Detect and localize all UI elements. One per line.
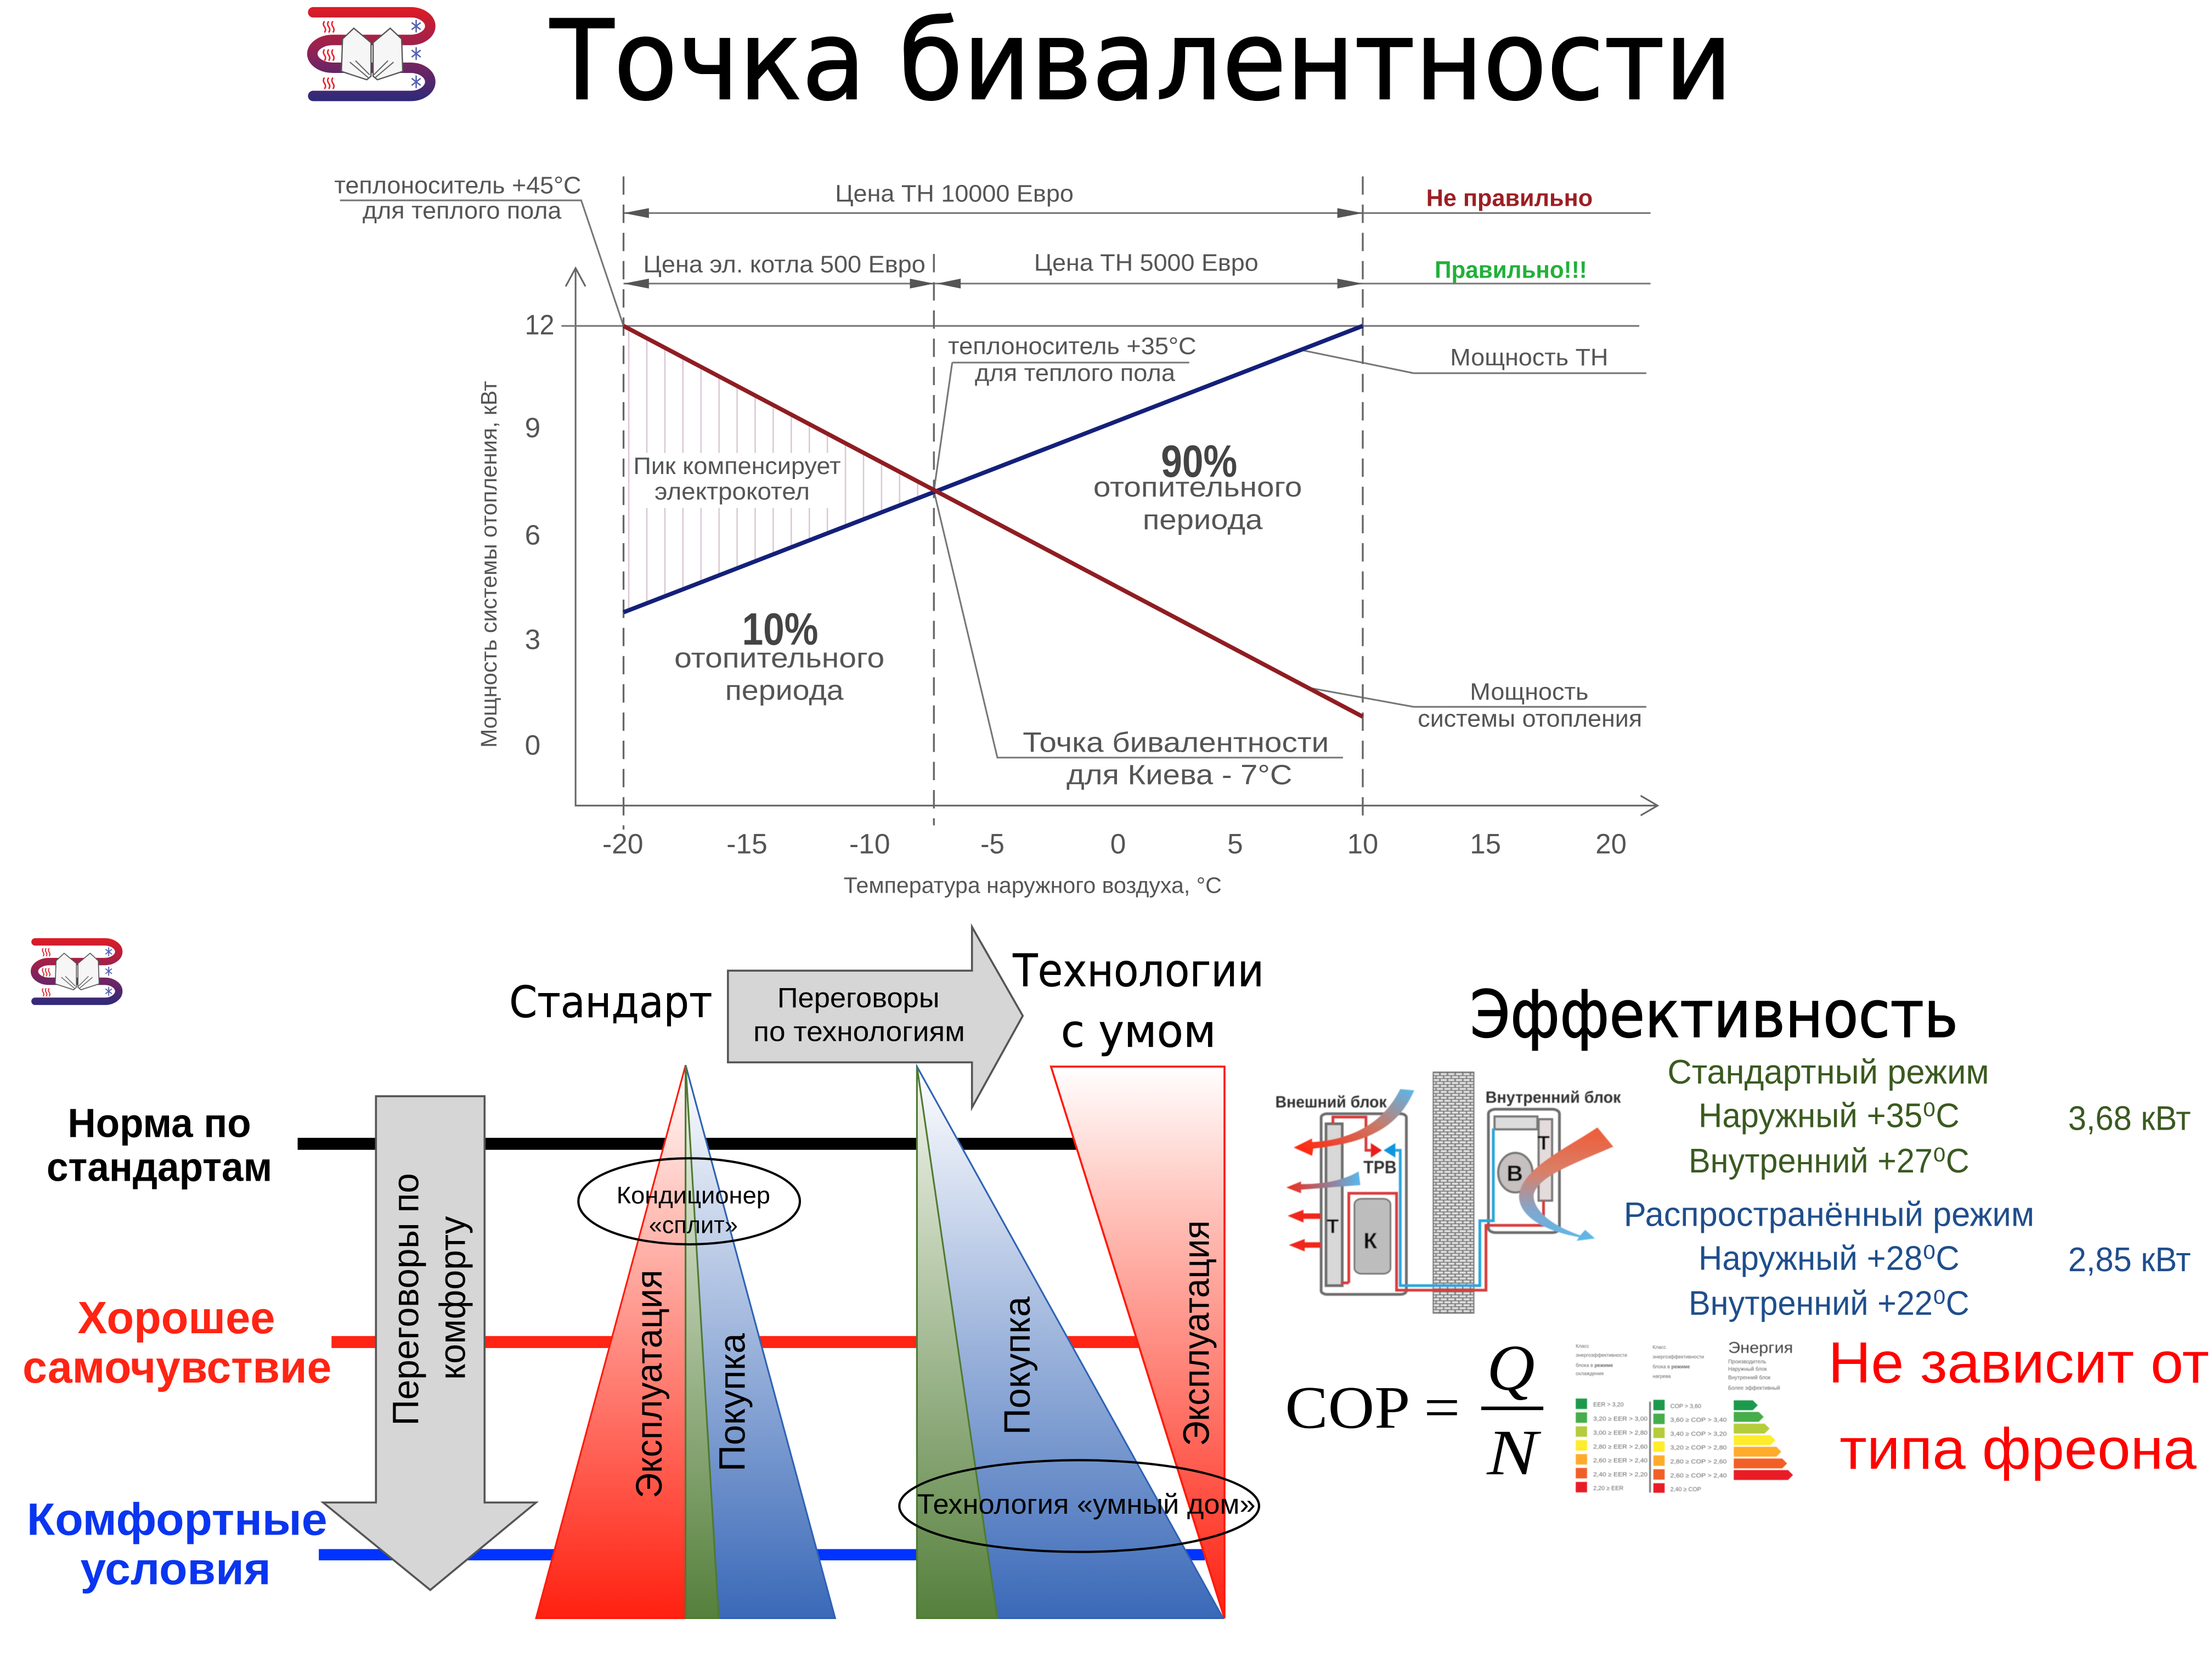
callout: 90 percent: 90% <box>1161 437 1237 487</box>
triangle group: smart technologies: Эксплуатация <box>1176 1220 1217 1446</box>
callout: independent of freon type: Не зависит от <box>1829 1331 2209 1395</box>
diagram labels: Внешний блок <box>1276 1093 1387 1112</box>
cooling class column: 3,20 ≥ EER > 3,00 <box>1593 1415 1647 1422</box>
diagram labels: Т <box>1327 1215 1339 1237</box>
label: norm by standards <box>47 1100 272 1189</box>
text block: standard mode: Стандартный режим <box>1667 1053 1989 1091</box>
arrow: comfort negotiations: Переговоры по <box>385 1173 426 1425</box>
triangle: purchase cost smart <box>917 1067 1223 1618</box>
triangle: operation cost smart <box>1051 1067 1224 1618</box>
chart annotations: Цена эл. котла 500 Евро <box>644 251 926 278</box>
text block: common mode: Внутренний +22⁰С <box>1689 1285 1970 1323</box>
label: norm by standards: стандартам <box>47 1143 272 1189</box>
label: comfortable conditions <box>27 1495 328 1594</box>
cooling class column: блока в режиме <box>1576 1362 1613 1368</box>
triangle: technology share smart <box>917 1067 997 1618</box>
cooling class column: 2,60 ≥ EER > 2,40 <box>1593 1458 1647 1464</box>
diagram labels: В <box>1506 1160 1523 1186</box>
wall <box>1434 1072 1474 1313</box>
heating class column: Класс <box>1652 1344 1666 1350</box>
formula: COP <box>1285 1332 1543 1488</box>
triangle: purchase cost <box>686 1065 835 1618</box>
dashed verticals <box>624 176 1363 830</box>
text block: common mode: 2,85 кВт <box>2068 1241 2191 1279</box>
line: heating system power <box>624 326 1363 717</box>
energy label arrows: Более эффективный <box>1728 1385 1780 1391</box>
callout: 90 percent: отопительного <box>1093 471 1302 503</box>
callout: bivalence point Kyiv: Точка бивалентности <box>1023 726 1329 758</box>
label: good wellbeing <box>22 1293 331 1392</box>
chart annotations: Пик компенсирует <box>634 453 841 480</box>
chart annotations <box>334 172 1642 732</box>
cooling class column: энергоэффективности <box>1576 1352 1627 1358</box>
callout: split air conditioner <box>578 1158 800 1244</box>
callout: 10 percent: 10% <box>742 605 818 655</box>
heating class column: 3,60 ≥ COP > 3,40 <box>1671 1417 1726 1424</box>
text block: standard mode: 3,68 кВт <box>2068 1100 2191 1138</box>
arrow: technology negotiations: Переговоры <box>777 982 940 1013</box>
hatch: peak compensated by electric boiler <box>629 329 918 610</box>
callout: smart home technology: Технология «умный дом» <box>917 1488 1256 1520</box>
callout: bivalence point Kyiv: для Киева - 7°С <box>1066 759 1292 791</box>
chart: bivalence point: Температура наружного воздуха, °С <box>844 873 1222 898</box>
heating class column: энергоэффективности <box>1652 1354 1704 1360</box>
line: heat pump power <box>624 326 1363 612</box>
text block: standard mode <box>1667 1053 2191 1180</box>
label: comfortable conditions: Комфортные <box>27 1495 328 1545</box>
axis tick labels: 15 <box>1470 828 1501 860</box>
diagram: split system <box>1276 1072 1621 1313</box>
diagram labels: ТРВ <box>1363 1157 1397 1177</box>
callout: 90 percent: периода <box>1143 503 1263 535</box>
arrow: technology negotiations <box>728 927 1023 1108</box>
chart annotations: системы отопления <box>1418 705 1642 732</box>
diagram labels: Т <box>1538 1132 1550 1154</box>
chart annotations: Цена ТН 5000 Евро <box>1034 250 1259 277</box>
heating class column: блока в режиме <box>1652 1364 1690 1369</box>
text block: standard mode: Внутренний +27⁰С <box>1689 1142 1970 1180</box>
callout: 90 percent <box>1093 437 1302 535</box>
guide lines <box>340 200 1651 758</box>
energy label arrows: Энергия <box>1728 1339 1793 1356</box>
axes <box>566 268 1657 815</box>
axis tick labels: 0 <box>525 729 540 761</box>
formula: COP: Q <box>1487 1332 1535 1404</box>
callout: 10 percent: периода <box>725 674 844 706</box>
diagram labels: Внутренний блок <box>1486 1089 1621 1107</box>
logo: top <box>312 12 430 96</box>
energy label arrows <box>1728 1339 1793 1480</box>
axis tick labels: -10 <box>849 828 890 860</box>
cooling class column: EER > 3,20 <box>1593 1402 1624 1408</box>
heating class column <box>1652 1344 1726 1493</box>
dimension arrows <box>624 208 1363 289</box>
label: norm by standards: Норма по <box>67 1100 251 1146</box>
heading: smart technologies: с умом <box>1061 1006 1216 1058</box>
chart: bivalence point <box>334 172 1657 898</box>
cooling class column: 2,40 ≥ EER > 2,20 <box>1593 1471 1647 1478</box>
heading: smart technologies: Технологии <box>1012 945 1264 997</box>
chart annotations: для теплого пола <box>975 359 1176 386</box>
chart annotations: Мощность ТН <box>1450 344 1608 371</box>
heating class column: 3,40 ≥ COP > 3,20 <box>1671 1431 1726 1437</box>
heating class column: 2,60 ≥ COP > 2,40 <box>1671 1473 1726 1479</box>
axis tick labels: 20 <box>1595 828 1627 860</box>
callout: 10 percent <box>674 605 884 706</box>
axis tick labels: -5 <box>980 828 1005 860</box>
triangle: operation cost <box>536 1065 686 1618</box>
verdict: wrong: Не правильно <box>1426 184 1593 211</box>
chart annotations: теплоноситель +35°С <box>948 332 1197 359</box>
heating class column: 3,20 ≥ COP > 2,80 <box>1671 1445 1726 1451</box>
axis tick labels: 6 <box>525 519 540 551</box>
label: comfortable conditions: условия <box>81 1544 271 1594</box>
formula: COP: COP = <box>1285 1373 1460 1441</box>
callout: split air conditioner: Кондиционер <box>617 1182 770 1209</box>
text block: common mode <box>1624 1196 2191 1323</box>
chart annotations: для теплого пола <box>363 198 562 224</box>
axis tick labels: 0 <box>1110 828 1126 860</box>
heading: standard: Стандарт <box>509 977 713 1028</box>
triangle: technology share <box>686 1065 719 1618</box>
heading: efficiency: Эффективность <box>1470 977 1958 1052</box>
callout: independent of freon type <box>1829 1331 2209 1481</box>
chart annotations: теплоноситель +45°С <box>334 172 581 199</box>
triangle group: smart technologies: Покупка <box>997 1296 1038 1435</box>
heading: smart technologies <box>1012 945 1264 1058</box>
callout: split air conditioner: «сплит» <box>649 1211 738 1238</box>
title: Точка бивалентности <box>550 0 1733 125</box>
axis tick labels: 10 <box>1347 828 1378 860</box>
cooling class column: 2,20 ≥ EER <box>1593 1485 1623 1492</box>
cooling class column: охлаждения <box>1576 1371 1604 1376</box>
formula: COP: N <box>1486 1417 1542 1488</box>
chart annotations: Мощность <box>1470 678 1588 705</box>
callout: smart home technology <box>899 1460 1259 1552</box>
heating class column: COP > 3,60 <box>1671 1403 1701 1409</box>
energy label arrows: Наружный блок <box>1728 1367 1767 1373</box>
heating class column: 2,40 ≥ COP <box>1671 1486 1701 1493</box>
arrow: comfort negotiations: комфорту <box>432 1216 473 1380</box>
text block: common mode: Наружный +28⁰С <box>1699 1239 1960 1277</box>
axis tick labels <box>525 308 1627 860</box>
diagram labels: К <box>1363 1228 1378 1254</box>
chart annotations: электрокотел <box>654 478 810 505</box>
heating class column: 2,80 ≥ COP > 2,60 <box>1671 1459 1726 1465</box>
diagram labels <box>1276 1089 1621 1254</box>
triangle group: standard: Эксплуатация <box>629 1270 670 1498</box>
axis titles: Мощность системы отопления, кВт <box>476 381 501 748</box>
cooling class column <box>1576 1344 1647 1492</box>
callout: bivalence point Kyiv <box>1023 726 1329 791</box>
energy label arrows: Производитель <box>1728 1359 1767 1365</box>
triangle group: smart technologies <box>917 1067 1224 1618</box>
text block: common mode: Распространённый режим <box>1624 1196 2034 1234</box>
logo: bottom <box>35 942 119 1001</box>
axis tick labels: -15 <box>726 828 768 860</box>
heating class column: нагрева <box>1652 1373 1671 1379</box>
axis tick labels: 5 <box>1227 828 1243 860</box>
triangle group: standard: Покупка <box>712 1333 753 1471</box>
energy label arrows: Внутренний блок <box>1728 1375 1771 1381</box>
energy efficiency table <box>1576 1339 1793 1493</box>
arrow: comfort negotiations <box>323 1096 536 1590</box>
text block: standard mode: Наружный +35⁰С <box>1699 1097 1960 1135</box>
axis tick labels: -20 <box>602 828 644 860</box>
axis tick labels: 3 <box>525 623 540 655</box>
arrow: technology negotiations: по технологиям <box>753 1016 965 1047</box>
triangle group: standard <box>536 1065 835 1618</box>
cooling class column: 3,00 ≥ EER > 2,80 <box>1593 1430 1647 1436</box>
cooling class column: 2,80 ≥ EER > 2,60 <box>1593 1443 1647 1450</box>
label: good wellbeing: Хорошее <box>77 1293 275 1343</box>
callout: independent of freon type: типа фреона <box>1839 1417 2197 1481</box>
axis tick labels: 12 <box>525 308 555 340</box>
comfort level lines <box>298 1138 1205 1560</box>
axis tick labels: 9 <box>525 411 540 443</box>
callout: 10 percent: отопительного <box>674 641 884 673</box>
cooling class column: Класс <box>1576 1344 1589 1349</box>
verdict: right: Правильно!!! <box>1435 257 1587 284</box>
label: good wellbeing: самочувствие <box>22 1343 331 1392</box>
chart annotations: Цена ТН 10000 Евро <box>835 181 1074 207</box>
